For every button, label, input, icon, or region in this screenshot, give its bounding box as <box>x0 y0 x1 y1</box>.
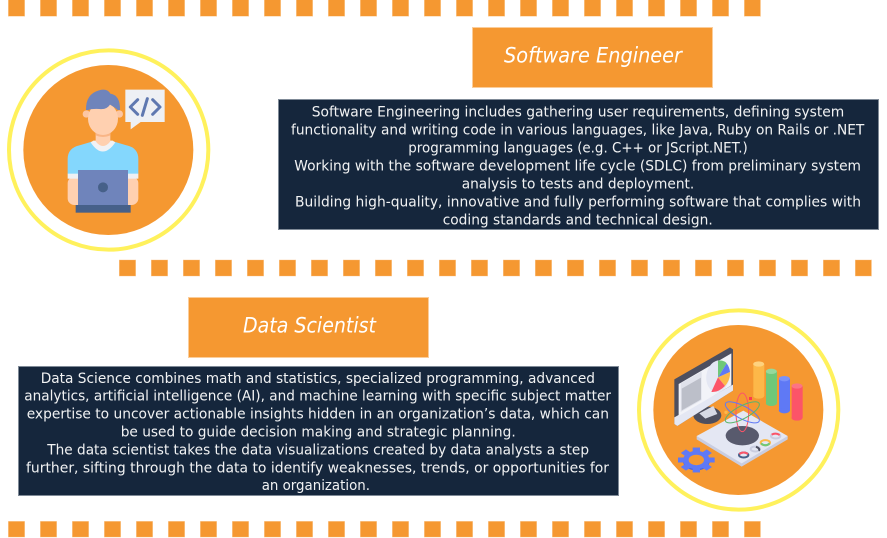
panel: software engineer description <box>278 100 878 230</box>
heading: Data Scientist <box>188 298 428 358</box>
text block: software engineer description: Building high-quality, innovative and fully performing software that complies with <box>295 193 861 210</box>
text block: software engineer description: programming languages (e.g. C++ or JScript.NET.) <box>408 140 748 156</box>
icon: computer monitor with pie chart <box>674 347 733 426</box>
text block: data scientist description: The data scientist takes the data visualizations created by data analysts a step <box>46 441 589 458</box>
text block: software engineer description <box>291 104 864 228</box>
text block: software engineer description: coding standards and technical design. <box>443 211 713 228</box>
icon: developer figure with laptop <box>68 90 138 213</box>
icon: speech bubble with code symbol <box>125 90 165 129</box>
text block: data scientist description: an organization. <box>262 477 370 494</box>
icon: cylinder bar chart <box>753 361 803 421</box>
icon: data scientist badge <box>639 310 838 510</box>
text block: data scientist description: expertise to uncover actionable insights hidden in an organization’s data, which can <box>27 406 609 423</box>
heading: Data Scientist: Data Scientist <box>243 314 377 338</box>
panel: data scientist description <box>18 366 618 496</box>
text block: data scientist description: analytics, artificial intelligence (AI), and machine learning with specific subject matter <box>24 388 611 405</box>
icon: atom <box>723 393 762 432</box>
heading: Software Engineer <box>472 28 712 88</box>
text block: software engineer description: Working with the software development life cycle (SDLC) from preliminary system <box>294 157 861 174</box>
text block: data scientist description: be used to guide decision making and strategic planning. <box>121 424 516 440</box>
heading: Software Engineer: Software Engineer <box>504 44 683 68</box>
icon: control platform <box>697 411 788 467</box>
top dotted divider <box>8 0 761 17</box>
bottom dotted divider <box>8 521 761 537</box>
icon: software engineer badge <box>9 50 208 250</box>
text block: data scientist description <box>24 370 611 494</box>
text block: software engineer description: Software Engineering includes gathering user requirements, defining system <box>312 104 844 120</box>
text block: data scientist description: Data Science combines math and statistics, specialized programming, advanced <box>41 370 595 387</box>
text block: data scientist description: further, sifting through the data to identify weaknesses, trends, or opportunities for <box>26 459 609 476</box>
middle dotted divider <box>119 260 872 276</box>
text block: software engineer description: functionality and writing code in various languages, like Java, Ruby on Rails or .NET <box>291 122 864 138</box>
text block: software engineer description: analysis to tests and deployment. <box>462 175 694 192</box>
icon: gear <box>678 448 715 472</box>
